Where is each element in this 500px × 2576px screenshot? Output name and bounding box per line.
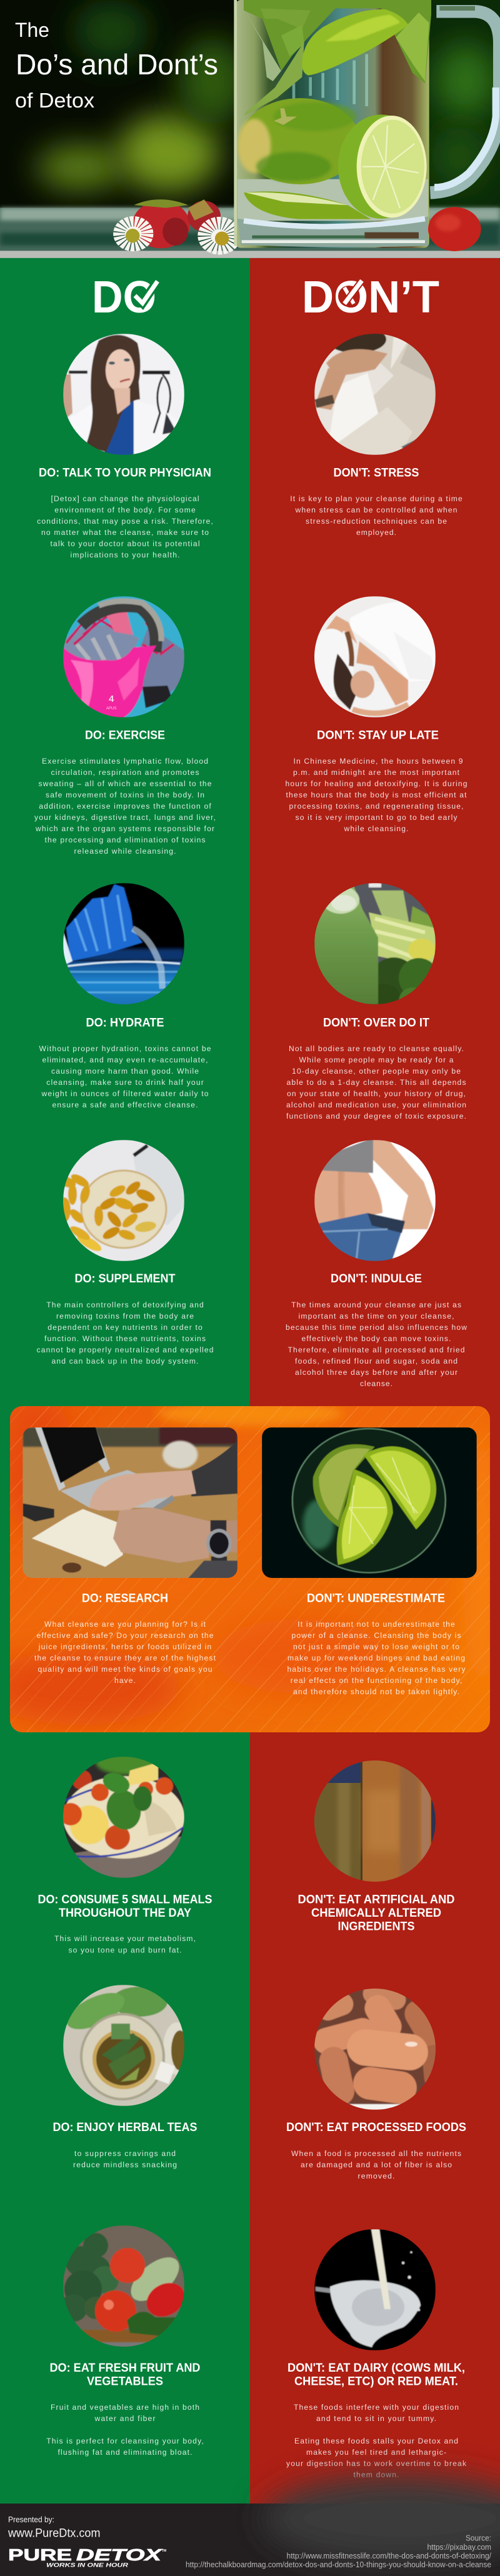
panel: do supplement [36,1140,213,1365]
photo: stressed man [314,326,436,455]
body text: underestimate: not just a simple way to lose weight or to [293,1642,459,1651]
body text: Not all bodies are ready to cleanse equally. [289,1044,464,1053]
orange textured background [0,1394,500,1732]
sources [186,2534,491,2569]
body text: 10-day cleanse, other people may only be [292,1067,461,1076]
heading: do research: DO: RESEARCH [82,1592,168,1605]
panel: don't stay up late [285,596,468,833]
body text [34,757,216,856]
logo: pure detox: WORKS IN ONE HOUR [46,2562,129,2569]
panel: do consume 5 small meals [38,1750,212,1955]
photo: pink kettlebell and shoes: APUS [106,707,116,711]
body text: makes you feel tired and lethargic- [306,2448,446,2457]
background: red don't column [250,258,500,2504]
photo: water bottle pouring [63,883,184,1005]
body text: cleansing, make sure to drink half your [46,1078,204,1087]
photo: woman sleeping [309,596,436,717]
body text: Exercise stimulates lymphatic flow, blood [42,757,208,766]
body text: underestimate: make up for weekend binges and bad eating [288,1654,465,1662]
heading: DON'T: STRESS [334,466,419,480]
body text: research: quality and will meet the kinds of goals you [38,1665,212,1674]
body text: It is key to plan your cleanse during a time [290,494,462,503]
heading: INGREDIENTS [338,1920,415,1933]
body text [73,2149,177,2169]
body text: them down. [354,2470,399,2479]
heading: DO: TALK TO YOUR PHYSICIAN [39,466,211,480]
body text: when stress can be controlled and when [295,506,458,514]
logo: pure detox: TM [162,2549,166,2553]
heading [288,2362,465,2389]
website: www.PureDtx.com [8,2527,100,2540]
body text: no matter what the cleanse, make sure to [41,528,209,537]
body text: reduce mindless snacking [73,2160,177,2169]
panel: do exercise [34,596,216,856]
body text: water and fiber [94,2414,155,2423]
photo: golden capsules in dish [55,1140,184,1261]
body text: foods, refined flour and sugar, soda and [295,1357,458,1365]
body text: p.m. and midnight are the most important [293,768,460,777]
panel: orange research and underestimate [0,1394,500,1732]
heading: DON'T: EAT PROCESSED FOODS [286,2121,466,2134]
heading: DON'T: STAY UP LATE [317,729,439,742]
heading [298,1894,455,1933]
heading: DON'T: EAT ARTIFICIAL AND [298,1894,455,1906]
heading: DON'T: INDULGE [331,1272,422,1286]
body text: processing toxins, and regenerating tissue, [289,802,464,811]
body text: ensure a safe and effective cleanse. [52,1101,198,1109]
body text: able to do a 1-day cleanse. This all depends [286,1078,466,1087]
heading: DO: ENJOY HERBAL TEAS [52,2121,198,2134]
body text: so you tone up and burn fat. [69,1946,181,1955]
body text: addition, exercise improves the function of [39,802,211,811]
body text: to suppress cravings and [74,2149,176,2158]
panel: don't over do it [286,883,466,1121]
body text: removing toxins from the body are [56,1312,194,1320]
body text: research: the cleanse to ensure they are of the highest [34,1654,216,1662]
panel: don't eat dairy or red meat [286,2229,467,2479]
body text: Fruit and vegetables are high in both [51,2403,199,2412]
heading: DO: EXERCISE [85,729,165,742]
photo: spices in jars [314,1760,436,1882]
body text: When a food is processed all the nutrients [291,2149,461,2158]
body text: flushing fat and eliminating bloat. [58,2448,192,2457]
body text: underestimate: and therefore should not be taken lightly. [293,1687,459,1696]
body text: sweating – all of which are essential to the [39,779,212,788]
presented by: Presented by: [8,2515,54,2524]
footer [0,2475,500,2576]
photo: milk pouring on spoon [314,2229,436,2350]
body text: hours for healing and detoxifying. It is during [285,779,468,788]
body text: stress-reduction techniques can be [306,517,447,526]
body text: alcohol and medication use, your elimination [286,1101,466,1109]
heading: CHEESE, ETC) OR RED MEAT. [294,2375,458,2389]
panel: don't indulge [286,1140,467,1388]
sources: Source: [466,2534,491,2542]
body text: The times around your cleanse are just as [291,1300,461,1309]
body text: This is perfect for cleansing your body, [46,2437,204,2445]
body text: cleanse. [360,1379,392,1388]
body text: so it is very important to go to bed early [295,813,458,822]
body text: these hours that the body is most efficient at [286,791,467,799]
body text: While some people may be ready for a [299,1056,454,1064]
body text: environment of the body. For some [54,506,196,514]
body text: underestimate: It is important not to underestimate the [298,1620,455,1629]
body text: safe movement of toxins in the body. In [46,791,204,799]
title [15,19,218,112]
photo: broccoli tomatoes and peppers [60,2225,191,2349]
body text [54,1934,196,1955]
body text: alcohol three days before and after your [295,1368,458,1377]
body text [36,1300,213,1365]
photo: waist in loose jeans [314,1140,436,1261]
body text: talk to your doctor about its potential [50,539,200,548]
body text: underestimate: real effects on the functioning of the body, [291,1676,462,1685]
body text: released while cleansing. [74,847,176,856]
body text: dependent on key nutrients in order to [48,1323,202,1332]
body text [46,2403,204,2457]
body text: [Detox] can change the physiological [51,494,199,503]
body text [285,757,468,833]
body text: underestimate [288,1620,466,1696]
body text: are damaged and a lot of fiber is also [301,2160,452,2169]
body text: circulation, respiration and promotes [51,768,199,777]
photo: sausages [310,1981,454,2110]
body text: Eating these foods stalls your Detox and [294,2437,458,2445]
logo: pure detox: PURE [8,2545,72,2564]
body text: the processing and elimination of toxins [45,836,206,844]
body text: function. Without these nutrients, toxins [44,1334,206,1343]
logo: pure detox: DETOX [76,2545,163,2564]
panel: do hydrate [39,883,211,1109]
body text: your digestion has to work overtime to break [286,2459,467,2468]
panel: do enjoy herbal teas [52,1985,198,2169]
body text: because this time period also influences how [286,1323,467,1332]
heading: DO: EAT FRESH FRUIT AND [50,2362,200,2375]
body text: This will increase your metabolism, [54,1934,196,1943]
heading: VEGETABLES [87,2375,163,2389]
photo: pink kettlebell and shoes: 4 [109,694,114,704]
body text [39,1044,211,1109]
panel: do eat fresh fruit and vegetables [46,2225,204,2457]
body text: weight in ounces of filtered water daily to [41,1089,209,1098]
body text [37,494,213,559]
body text: These foods interfere with your digestion [294,2403,459,2412]
body text: effectively the body can move toxins. [301,1334,451,1343]
body text: on your state of health, your history of drug, [287,1089,466,1098]
photo: bowl of food with basil [59,1750,184,1878]
body text [286,2403,467,2479]
body text: The main controllers of detoxifying and [46,1300,204,1309]
body text: underestimate: habits over the holidays. A cleanse has very [288,1665,466,1674]
body text: eliminated, and may even re-accumulate, [42,1056,208,1064]
body text: cannot be properly neutralized and expelled [36,1345,213,1354]
mug handle [430,11,499,192]
body text: research [34,1620,216,1685]
body text: and tend to sit in your tummy. [316,2414,436,2423]
heading: DO: HYDRATE [86,1016,164,1029]
photo: pink kettlebell and shoes [63,596,184,717]
hero photo: glass of lime water [0,0,500,258]
body text: research: effective and safe? Do your research on the [36,1631,214,1640]
photo: doctor [63,334,184,455]
heading: don't with cross: DON’T [302,272,439,322]
logo: pure detox [8,2545,166,2569]
body text: implications to your health. [70,551,180,559]
body text [286,1044,466,1121]
body text: important as the time on your cleanse, [299,1312,454,1320]
body text: research: juice ingredients, herbs or foods utilized in [38,1642,211,1651]
body text [286,1300,467,1388]
heading [50,2362,200,2389]
heading: DO: CONSUME 5 SMALL MEALS [38,1894,212,1906]
heading: don't underestimate: DON'T: UNDERESTIMATE [307,1592,445,1605]
body text: while cleansing. [344,824,409,833]
panel: do talk to your physician [37,334,213,559]
body text: research: What cleanse are you planning for? Is it [44,1620,206,1629]
panel: don't eat processed foods [286,1981,466,2180]
heading [38,1894,212,1920]
body text: functions and your degree of toxic exposure. [286,1112,466,1121]
body text: research: have. [114,1676,136,1685]
panel: don't eat artificial ingredients [298,1760,455,1933]
body text: Therefore, eliminate all processed and fried [288,1345,465,1354]
body text: Without proper hydration, toxins cannot be [39,1044,211,1053]
photo: lime slices in glass [262,1427,477,1578]
background: green do column [0,258,250,2504]
body text: conditions, that may pose a risk. Therefore, [37,517,213,526]
photo: mint tea in glass [61,1985,191,2106]
photo: writing notes at laptop [22,1427,238,1578]
body text [290,494,462,537]
body text: your kidneys, digestive tract, lungs and liver, [34,813,216,822]
body text [291,2149,461,2180]
body text: underestimate: power of a cleanse. Cleansing the body is [291,1631,461,1640]
body text: In Chinese Medicine, the hours between 9 [294,757,463,766]
heading: DO: SUPPLEMENT [75,1272,176,1286]
body text: and can back up in the body system. [51,1357,199,1365]
heading: CHEMICALLY ALTERED [311,1907,441,1920]
body text: which are the organ systems responsible for [35,824,214,833]
heading: THROUGHOUT THE DAY [59,1907,191,1920]
hero photo with title [0,0,500,258]
title: The [15,19,49,41]
body text: employed. [356,528,396,537]
heading: DON'T: EAT DAIRY (COWS MILK, [288,2362,465,2375]
heading: DON'T: OVER DO IT [323,1016,429,1029]
sources: https://pixabay.com [428,2542,491,2552]
body text: removed. [358,2172,395,2180]
photo: green juice and celery [314,883,436,1004]
body text: causing more harm than good. While [51,1067,199,1076]
panel: don't stress [290,326,462,537]
heading: do with check: DO [92,272,156,322]
title: of Detox [15,89,95,112]
title: Do’s and Dont’s [16,48,218,81]
